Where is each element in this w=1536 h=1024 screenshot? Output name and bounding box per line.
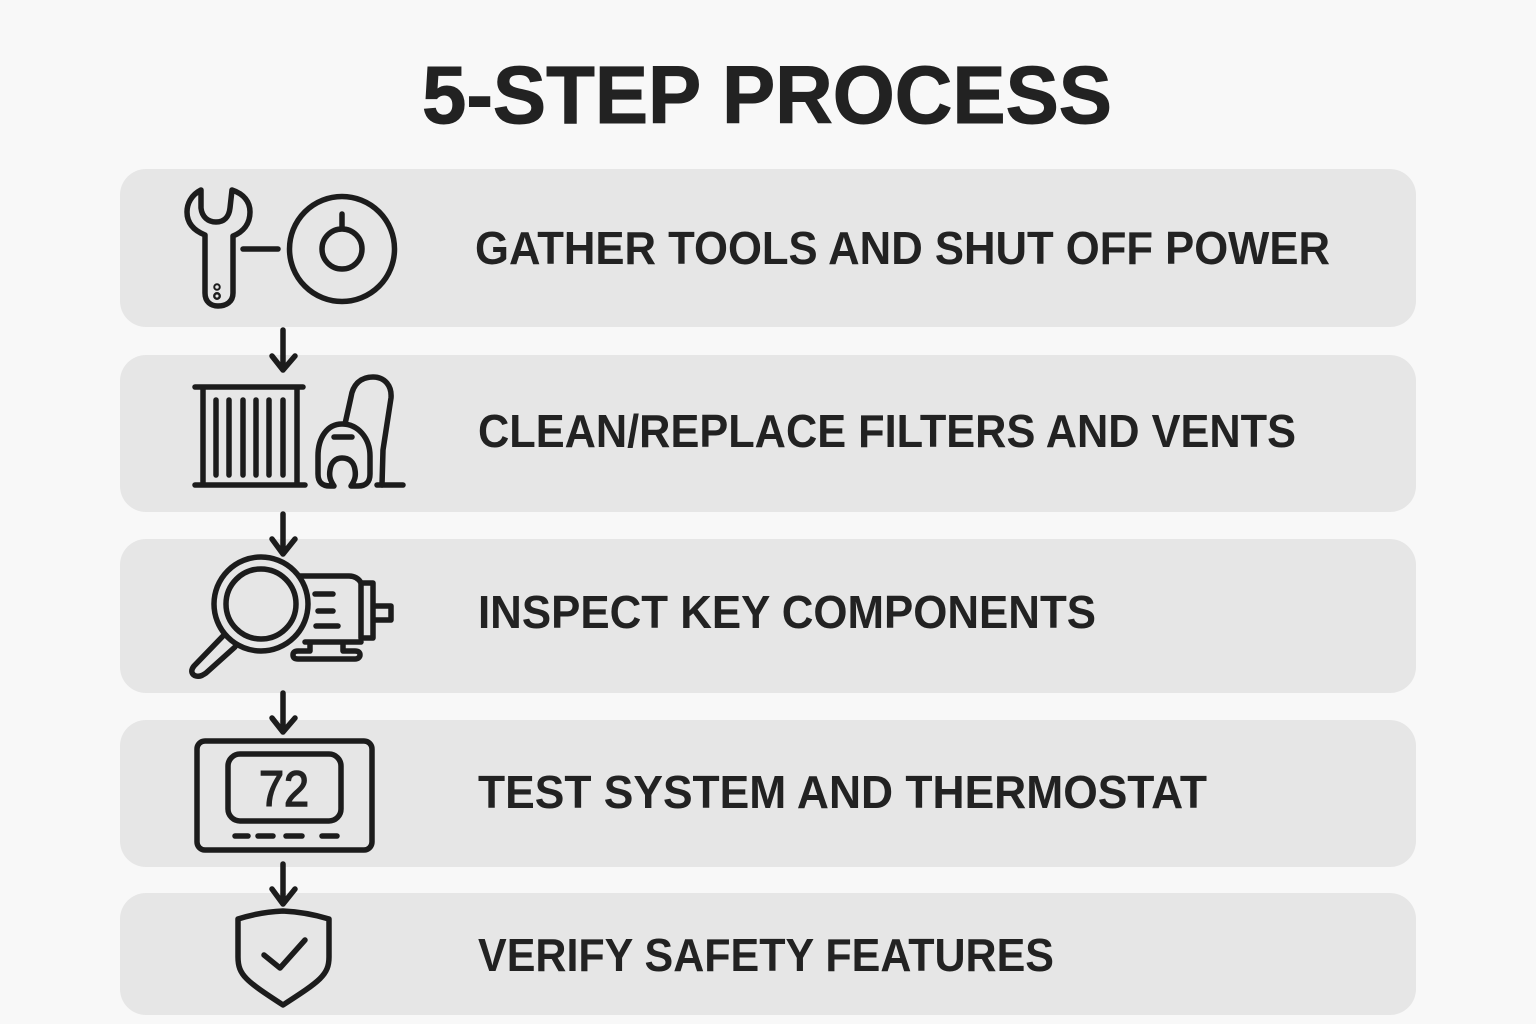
label: step 2: CLEAN/REPLACE FILTERS AND VENTS (478, 405, 1296, 457)
icon: thermostat: 72 (259, 761, 309, 817)
panel: step 3 (120, 539, 1416, 693)
icon: air filter vent (195, 387, 305, 485)
icon: magnifier over motor (192, 557, 391, 676)
label: step 1: GATHER TOOLS AND SHUT OFF POWER (475, 222, 1330, 274)
arrow: step 4 to step 5 (272, 864, 295, 904)
panel: step 5 (120, 893, 1416, 1015)
panel: step 4 (120, 720, 1416, 867)
panel: step 1 (120, 169, 1416, 327)
label: step 4: TEST SYSTEM AND THERMOSTAT (478, 766, 1207, 818)
icon: vacuum cleaner (318, 377, 403, 486)
arrow: step 3 to step 4 (272, 693, 295, 732)
panel: step 2 (120, 355, 1416, 512)
label: step 3: INSPECT KEY COMPONENTS (478, 586, 1096, 638)
icon: safety shield (238, 911, 329, 1005)
label: step 5: VERIFY SAFETY FEATURES (478, 929, 1054, 981)
icon: wrench and power dial (187, 190, 394, 306)
icon: thermostat (197, 741, 372, 850)
arrow: step 1 to step 2 (272, 330, 295, 370)
title: 5-STEP PROCESS (422, 50, 1112, 141)
arrow: step 2 to step 3 (272, 514, 295, 554)
